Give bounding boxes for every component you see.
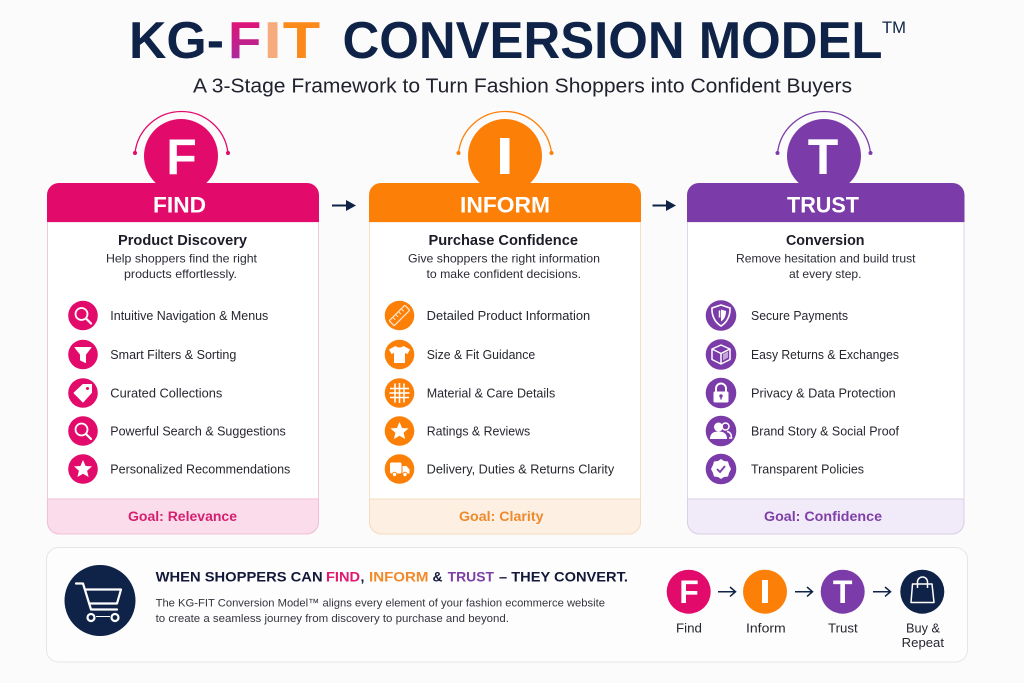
inform list <box>385 301 615 484</box>
arrow: find to inform <box>332 200 356 211</box>
item text: Smart Filters & Sorting <box>110 348 236 362</box>
summary background <box>46 548 968 662</box>
summary headline <box>156 569 628 585</box>
icon: t-shirt <box>385 340 414 369</box>
find goal strip: Goal: Relevance <box>128 509 238 524</box>
find subheading: Product Discovery <box>118 233 247 249</box>
flow: find <box>667 570 711 636</box>
flow: inform <box>743 570 787 636</box>
inform goal strip: Goal: Clarity <box>459 509 544 524</box>
icon: verified badge <box>706 454 736 484</box>
find badge: F <box>166 129 197 185</box>
trust description: Remove hesitation and build trust <box>736 252 916 266</box>
summary headline: FIND <box>326 569 360 585</box>
title: F <box>228 12 261 70</box>
find header <box>47 183 319 222</box>
inform description <box>408 252 600 281</box>
trust card body <box>688 222 964 534</box>
icon: tag <box>68 378 98 408</box>
trust header label: TRUST <box>787 192 860 218</box>
trust list <box>706 300 900 484</box>
flow: buy and repeat <box>900 570 944 650</box>
summary headline: – THEY CONVERT. <box>499 569 628 585</box>
summary headline: & <box>432 569 442 585</box>
icon: shield <box>706 300 736 331</box>
icon: ruler <box>385 301 414 330</box>
panel: inform <box>369 111 641 534</box>
item text: Curated Collections <box>110 386 222 400</box>
item text: Personalized Recommendations <box>110 462 290 476</box>
flow: buy and repeat: Repeat <box>902 635 944 650</box>
find badge <box>133 111 230 193</box>
item text: Secure Payments <box>751 309 848 323</box>
trust header <box>687 183 964 222</box>
inform subheading: Purchase Confidence <box>428 233 578 249</box>
panel: find <box>47 111 319 534</box>
trust goal strip: Goal: Confidence <box>764 509 883 524</box>
icon: lock <box>706 378 736 408</box>
title: TM <box>882 18 906 37</box>
find header label: FIND <box>153 192 206 218</box>
item text: Powerful Search & Suggestions <box>110 424 286 438</box>
find description: products effortlessly. <box>124 267 237 281</box>
flow: trust: T <box>833 574 853 610</box>
flow: buy and repeat: Buy & <box>906 621 940 636</box>
find goal strip <box>48 499 318 534</box>
summary headline: TRUST <box>448 569 494 585</box>
icon: star <box>385 416 414 446</box>
flow arrow <box>873 587 890 596</box>
arrow: inform to trust <box>652 200 676 211</box>
flow arrow <box>795 587 812 596</box>
title: T <box>283 12 320 70</box>
summary headline: , <box>360 569 364 585</box>
summary body text <box>156 598 605 625</box>
panel: summary <box>46 548 968 662</box>
icon: truck <box>385 454 414 484</box>
trust subheading: Conversion <box>786 233 864 249</box>
title: I <box>263 12 282 70</box>
subtitle: A 3-Stage Framework to Turn Fashion Shoppers into Confident Buyers <box>193 76 852 98</box>
item text: Brand Story & Social Proof <box>751 424 900 438</box>
flow: find: F <box>679 574 699 610</box>
item text: Easy Returns & Exchanges <box>751 348 899 362</box>
flow: find: Find <box>676 621 702 636</box>
inform description: Give shoppers the right information <box>408 252 600 266</box>
find list <box>68 301 290 484</box>
flow: inform: Inform <box>746 621 786 636</box>
find description <box>106 252 258 281</box>
item text: Ratings & Reviews <box>427 424 530 438</box>
icon: funnel <box>68 340 98 369</box>
flow arrow <box>718 587 736 596</box>
flow: trust <box>821 570 865 636</box>
trust goal strip <box>688 499 964 534</box>
trust badge <box>776 111 872 193</box>
item text: Intuitive Navigation & Menus <box>110 309 268 323</box>
flow: trust: Trust <box>828 621 858 636</box>
trust description: at every step. <box>789 267 862 281</box>
inform card body <box>370 222 640 534</box>
summary body text: to create a seamless journey from discovery to purchase and beyond. <box>156 613 509 625</box>
summary headline: INFORM <box>369 569 428 585</box>
trust badge: T <box>808 129 838 185</box>
icon: star <box>68 454 98 484</box>
item text: Material & Care Details <box>427 386 555 400</box>
panel: trust <box>687 111 964 534</box>
item text: Detailed Product Information <box>427 309 590 323</box>
icon: people <box>706 416 736 446</box>
icon: search <box>68 301 98 330</box>
inform description: to make confident decisions. <box>426 267 581 281</box>
inform header label: INFORM <box>460 192 550 218</box>
title: KG- <box>129 12 224 70</box>
summary body text: The KG-FIT Conversion Model™ aligns every element of your fashion ecommerce website <box>156 598 605 610</box>
icon: fabric grid <box>385 378 414 408</box>
inform header <box>369 183 641 222</box>
icon: box <box>706 339 736 370</box>
item text: Delivery, Duties & Returns Clarity <box>427 462 615 476</box>
icon: search <box>68 416 98 446</box>
trust description <box>736 252 916 281</box>
inform goal strip <box>370 499 640 534</box>
item text: Transparent Policies <box>751 462 864 476</box>
find card body <box>48 222 318 534</box>
find description: Help shoppers find the right <box>106 252 258 266</box>
item text: Size & Fit Guidance <box>427 348 535 362</box>
summary headline: WHEN SHOPPERS CAN <box>156 569 323 585</box>
title: CONVERSION MODEL <box>342 12 882 70</box>
inform badge <box>456 111 554 193</box>
icon: shopping cart <box>64 565 136 636</box>
item text: Privacy & Data Protection <box>751 386 896 400</box>
